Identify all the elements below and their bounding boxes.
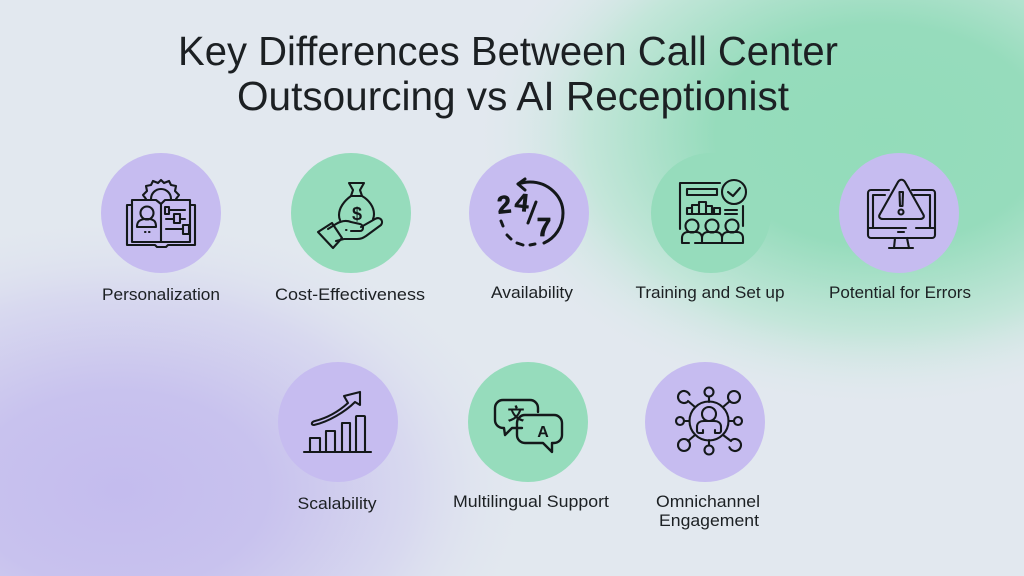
icon: 24/7 clock arrow: 7	[537, 212, 551, 242]
icon: 24/7 clock arrow	[496, 179, 563, 245]
icon: growth bars and arrow	[304, 392, 371, 452]
item: Omnichannel Engagement	[645, 362, 765, 530]
label: Personalization	[102, 285, 220, 304]
label: Potential for Errors	[829, 283, 971, 302]
icon: translation speech bubbles: A	[537, 424, 549, 441]
icon: 24/7 clock arrow: 2	[496, 190, 513, 220]
icon: translation speech bubbles: 文	[508, 400, 524, 425]
circle: Scalability	[278, 362, 398, 482]
icon: central person with network nodes	[676, 388, 743, 454]
label: Engagement	[659, 511, 759, 530]
item: Potential for Errors	[829, 153, 971, 302]
item: Personalization	[101, 153, 221, 304]
icon: 24/7 clock arrow: 4	[513, 188, 530, 218]
circle: Availability	[469, 153, 589, 273]
title	[178, 28, 838, 119]
title: Outsourcing vs AI Receptionist	[237, 73, 790, 119]
label	[656, 492, 760, 530]
item: Training and Set up	[636, 153, 784, 302]
label: Availability	[491, 283, 573, 302]
label: Training and Set up	[636, 283, 784, 302]
label: Omnichannel	[656, 492, 760, 511]
icon: book with person and gear	[127, 180, 195, 247]
icon: money bag in hand	[318, 183, 382, 248]
circle: Omnichannel Engagement	[645, 362, 765, 482]
item: Scalability	[278, 362, 398, 513]
icon: money bag in hand: $	[352, 204, 362, 224]
label: Cost-Effectiveness	[275, 285, 425, 304]
icon: monitor with warning	[868, 180, 935, 248]
circle: Potential for Errors	[839, 153, 959, 273]
icon: translation speech bubbles	[495, 400, 562, 452]
item: Availability	[469, 153, 589, 302]
circle: Training and Set up	[651, 153, 771, 273]
label: Multilingual Support	[453, 492, 609, 511]
circle: Cost-Effectiveness	[291, 153, 411, 273]
icon: presentation board with audience	[680, 180, 746, 243]
item: Multilingual Support	[453, 362, 609, 511]
circle: Personalization	[101, 153, 221, 273]
title: Key Differences Between Call Center	[178, 28, 838, 74]
label: Scalability	[298, 494, 377, 513]
circle: Multilingual Support	[468, 362, 588, 482]
item: Cost-Effectiveness	[275, 153, 425, 304]
